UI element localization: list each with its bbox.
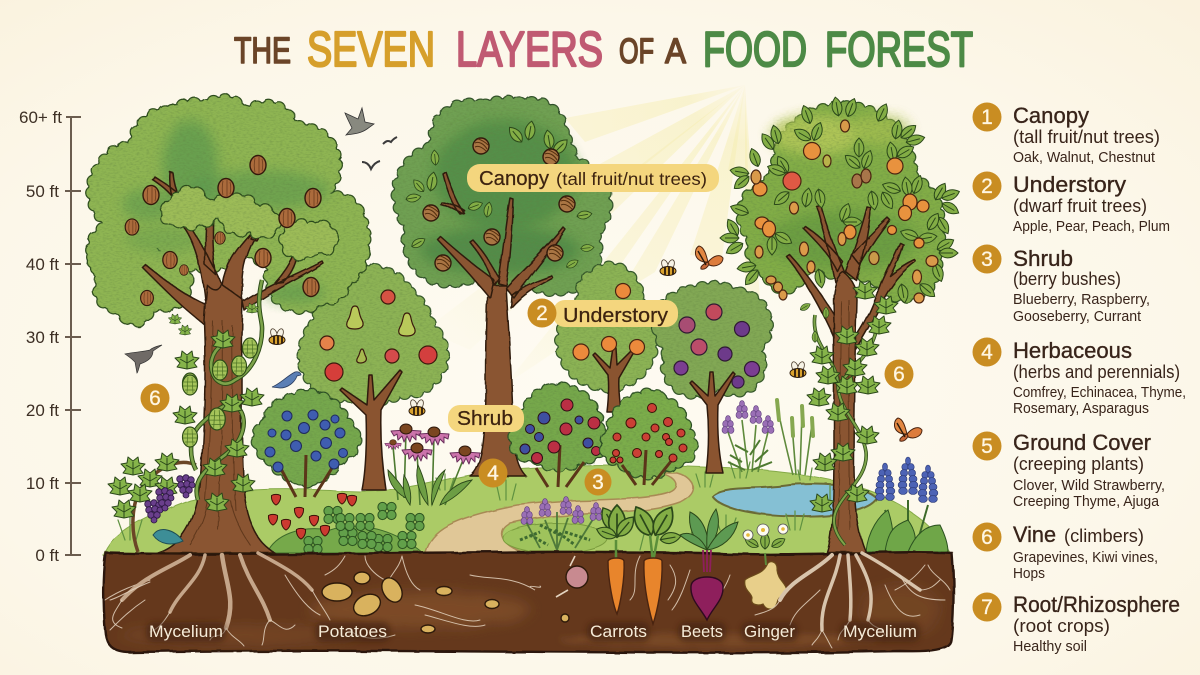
number badge: vine left: 6 — [149, 387, 161, 410]
trunk and branches — [438, 172, 565, 476]
legend item 4: herbaceous — [972, 338, 1186, 417]
leaves — [720, 96, 961, 304]
soil layer — [104, 503, 954, 653]
fruits — [320, 290, 437, 381]
understory pear and apple tree — [303, 270, 443, 490]
soil labels: Mycelium — [149, 623, 223, 641]
radish — [556, 556, 588, 597]
soil labels — [146, 622, 920, 642]
legend item 4: herbaceous: 4 — [981, 341, 993, 364]
potatoes — [322, 572, 569, 633]
lavender bed — [503, 523, 607, 553]
number badge: shrub — [584, 468, 612, 496]
legend item 2: understory: 2 — [981, 175, 993, 198]
bird: top — [345, 108, 374, 135]
title: LAYERS — [456, 23, 603, 77]
herbaceous layer: lavender and asparagus — [722, 400, 813, 475]
lavender bed plants — [520, 496, 602, 550]
right fruit tree — [720, 96, 961, 648]
understory callout: 2 — [536, 302, 548, 325]
legend item 3: shrub — [972, 244, 1150, 325]
gooseberry and currant shrub — [605, 394, 692, 485]
blueberry shrub — [258, 394, 355, 497]
legend item 4: herbaceous: (herbs and perennials) — [1013, 362, 1180, 382]
height axis: 50 ft — [26, 182, 59, 201]
understory callout — [528, 298, 678, 328]
legend item 6: vine: 6 — [981, 526, 993, 549]
left tree roots — [110, 553, 330, 646]
height axis: 30 ft — [26, 328, 59, 347]
legend item 2: understory: Understory — [1013, 172, 1126, 197]
canopy callout: Canopy — [479, 167, 550, 190]
peaches — [573, 284, 644, 360]
dirt path — [425, 473, 693, 553]
herbaceous layer: echinacea — [385, 424, 480, 505]
legend item 6: vine: Grapevines, Kiwi vines, — [1013, 549, 1158, 566]
lupines — [866, 457, 948, 552]
legend item 5: ground cover — [972, 430, 1165, 510]
height axis: 60+ ft — [19, 108, 62, 127]
legend item 1: canopy: (tall fruit/nut trees) — [1013, 127, 1160, 147]
left canopy tree — [92, 100, 365, 646]
carrot greens — [595, 503, 682, 562]
legend item 2: understory — [972, 172, 1170, 235]
legend item 3: shrub: Gooseberry, Currant — [1013, 308, 1142, 325]
forest ground with path and pond — [104, 465, 952, 556]
legend item 1: canopy: 1 — [981, 106, 993, 129]
legend item 5: ground cover: (creeping plants) — [1013, 454, 1144, 474]
ground cover: strawberries and clover — [267, 493, 424, 554]
title: A — [665, 32, 687, 71]
beet — [680, 509, 738, 620]
legend item 1: canopy: Canopy — [1013, 103, 1089, 128]
legend item 6: vine: Hops — [1013, 565, 1045, 582]
carrots — [608, 558, 662, 624]
understory peach tree — [561, 268, 653, 412]
number badge: vine left — [140, 384, 170, 412]
trunk — [142, 172, 323, 553]
legend item 2: understory: (dwarf fruit trees) — [1013, 196, 1147, 216]
title: OF — [619, 32, 654, 71]
vine on left tree — [108, 280, 264, 552]
grapes — [145, 475, 195, 523]
legend item 3: shrub: Shrub — [1013, 246, 1073, 271]
blue bird — [272, 372, 301, 388]
legend item 1: canopy — [972, 102, 1160, 166]
birds — [125, 108, 397, 388]
legend item 2: understory: Apple, Pear, Peach, Plum — [1013, 218, 1170, 235]
legend item 3: shrub: Blueberry, Raspberry, — [1013, 291, 1150, 308]
height axis: 10 ft — [26, 474, 59, 493]
legend item 1: canopy: Oak, Walnut, Chestnut — [1013, 149, 1156, 166]
berries — [610, 404, 687, 463]
vine leaves — [799, 281, 898, 512]
legend item 7: root: Root/Rhizosphere — [1013, 592, 1180, 617]
legend item 7: root — [972, 592, 1180, 655]
hops — [182, 338, 258, 447]
height axis — [19, 108, 81, 565]
legend item 5: ground cover: Clover, Wild Strawberry, — [1013, 477, 1165, 494]
soil labels: Mycelium — [843, 623, 917, 641]
sun rays — [425, 85, 760, 385]
legend item 3: shrub: 3 — [981, 248, 993, 271]
upper foliage clusters — [165, 192, 332, 255]
bees and butterflies — [269, 246, 922, 441]
soil labels: Ginger — [744, 623, 796, 641]
soil labels: Potatoes — [318, 623, 387, 641]
vine on right tree — [799, 281, 898, 545]
grass tufts — [118, 458, 830, 550]
ginger — [743, 524, 788, 609]
title: FOREST — [825, 23, 973, 77]
legend item 5: ground cover: 5 — [981, 435, 993, 458]
legend item 6: vine: (climbers) — [1064, 526, 1144, 546]
blueberries — [265, 410, 348, 472]
raspberries — [520, 399, 600, 464]
legend item 3: shrub: (berry bushes) — [1013, 269, 1121, 289]
soil labels: Beets — [681, 623, 723, 641]
vine leaves — [108, 303, 264, 518]
grass — [104, 465, 952, 556]
walnuts — [423, 138, 575, 271]
canopy callout — [467, 164, 719, 192]
title: THE — [234, 30, 291, 71]
trunk — [787, 206, 916, 552]
shrub callout: Shrub — [457, 408, 513, 430]
fruits — [751, 120, 938, 303]
legend item 4: herbaceous: Rosemary, Asparagus — [1013, 400, 1149, 417]
legend item 5: ground cover: Ground Cover — [1013, 430, 1151, 455]
number badge: vine right: 6 — [893, 363, 905, 386]
title: SEVEN — [307, 23, 435, 77]
teal leaf — [153, 530, 183, 544]
number badge: shrub: 3 — [592, 471, 604, 494]
legend item 7: root: 7 — [981, 596, 993, 619]
shrub callout — [448, 405, 524, 432]
birds: small — [362, 137, 397, 169]
legend item 6: vine — [972, 522, 1158, 582]
legend item 7: root: (root crops) — [1013, 616, 1110, 636]
legend item 5: ground cover: Creeping Thyme, Ajuga — [1013, 493, 1160, 510]
canopy callout: (tall fruit/nut trees) — [556, 169, 707, 189]
right tree roots — [755, 553, 945, 648]
understory plum tree — [658, 287, 767, 473]
legend item 6: vine: Vine — [1013, 522, 1056, 547]
number badge: vine right — [884, 360, 914, 388]
legend — [972, 102, 1186, 655]
number badge: herbaceous — [478, 458, 508, 488]
height axis: 20 ft — [26, 401, 59, 420]
number badge: herbaceous: 4 — [487, 462, 499, 485]
soil labels: Carrots — [590, 623, 647, 641]
legend item 4: herbaceous: Comfrey, Echinacea, Thyme, — [1013, 384, 1186, 401]
understory callout: Understory — [563, 304, 669, 327]
title: FOOD — [703, 23, 807, 77]
foliage — [92, 100, 365, 320]
pond — [712, 484, 877, 516]
acorns and nuts — [125, 156, 321, 306]
legend item 4: herbaceous: Herbaceous — [1013, 338, 1132, 363]
canopy foliage — [398, 102, 606, 290]
raspberry shrub — [514, 388, 603, 487]
legend item 7: root: Healthy soil — [1013, 638, 1087, 655]
height axis: 0 ft — [35, 546, 59, 565]
small roots and mycelium — [105, 556, 950, 638]
center canopy tree — [398, 102, 606, 476]
plums — [674, 304, 760, 388]
hummingbird — [125, 345, 162, 373]
title — [234, 23, 973, 77]
leaves — [405, 120, 594, 270]
height axis: 40 ft — [26, 255, 59, 274]
